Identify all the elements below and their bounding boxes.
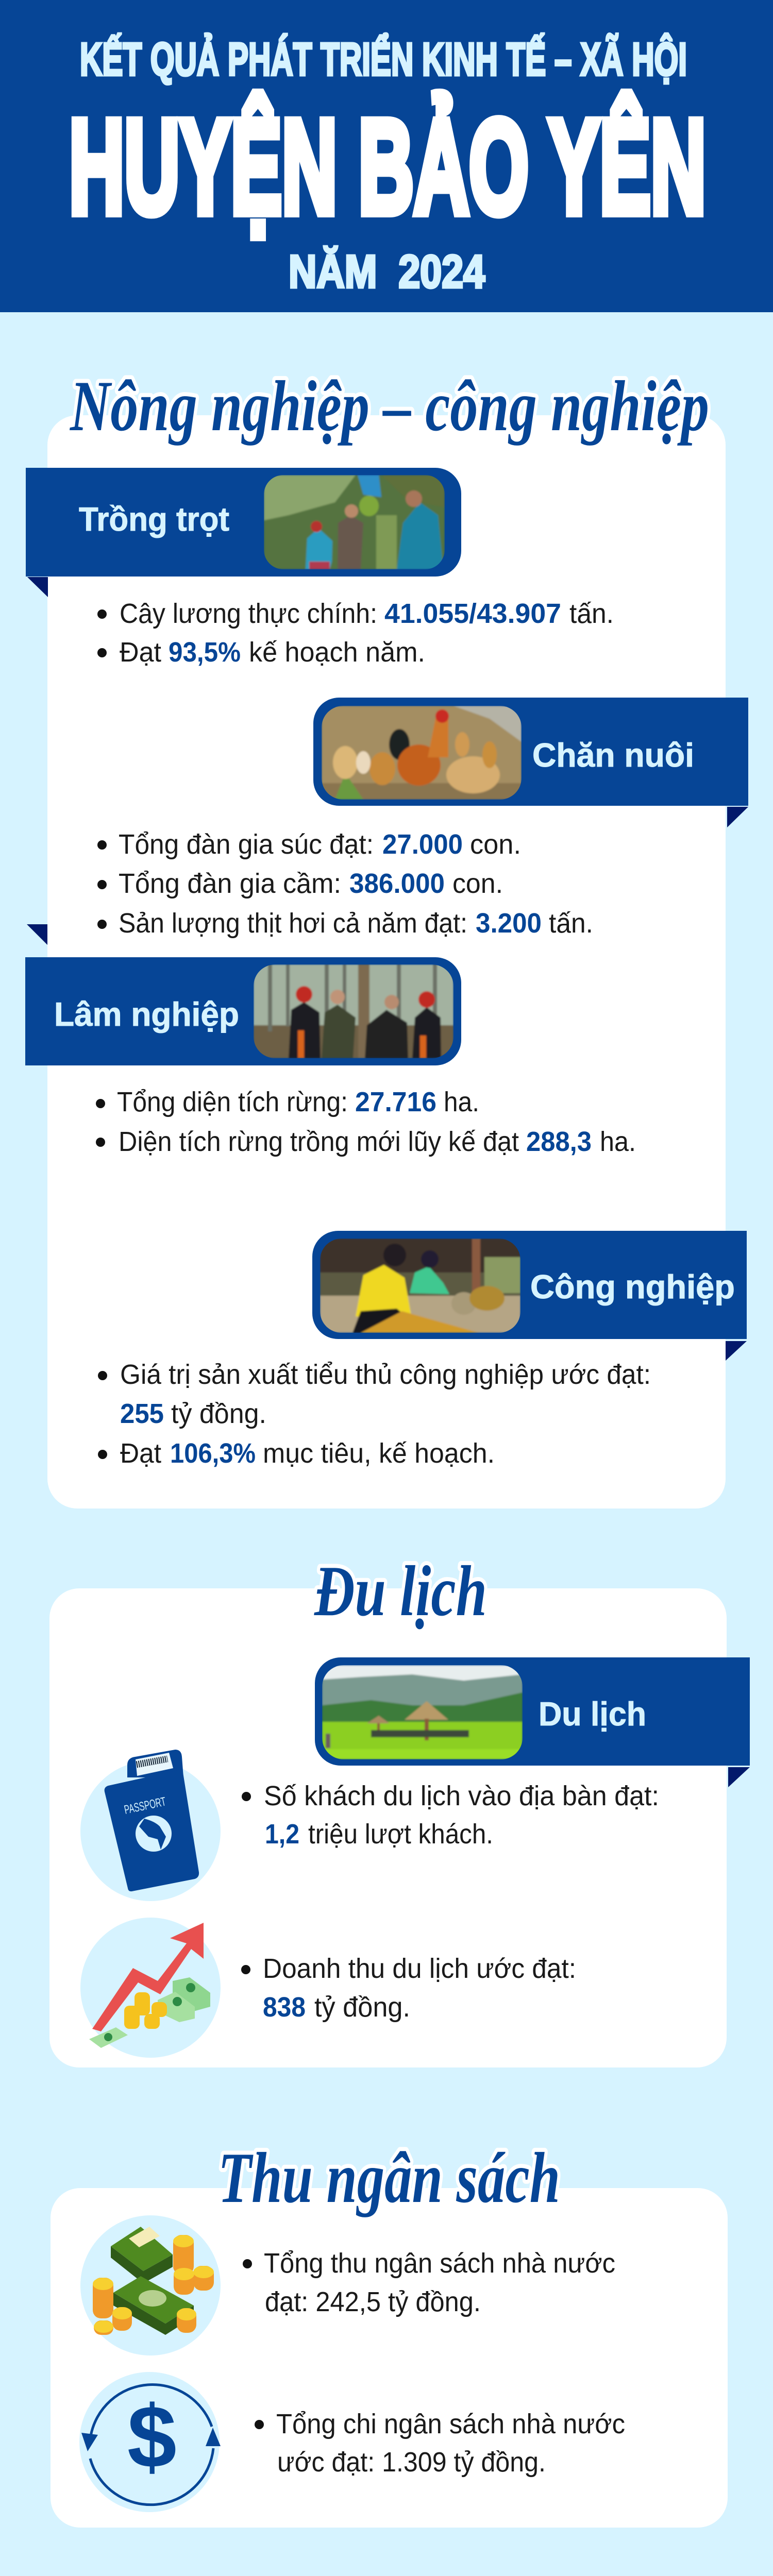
bullet item: Diện tích rừng trồng mới lũy kế đạt bbox=[119, 1126, 519, 1157]
bullet: số khách du lịch: 1,2 bbox=[265, 1819, 299, 1850]
bullet item: 288,3 bbox=[526, 1126, 592, 1157]
bullet: số khách du lịch: triệu lượt khách. bbox=[308, 1819, 493, 1850]
bullet item: tỷ đồng. bbox=[171, 1398, 266, 1429]
bullets: lâm nghiệp bbox=[96, 1087, 636, 1157]
bullet item: ha. bbox=[444, 1087, 479, 1117]
panel: thu ngân sách bbox=[51, 2138, 728, 2528]
ribbon: du lịch bbox=[315, 1657, 750, 1787]
bullet item: Tổng diện tích rừng: bbox=[117, 1087, 348, 1117]
subtitle: năm 2024: NĂM 2024 bbox=[289, 246, 485, 298]
panel background bbox=[51, 2188, 728, 2528]
photo: trồng chuối bbox=[264, 475, 445, 569]
ribbon title: Trồng trọt bbox=[79, 500, 229, 538]
bullet item: 41.055/43.907 bbox=[384, 598, 561, 629]
bullets: trồng trọt bbox=[97, 598, 614, 668]
section heading: Thu ngân sách bbox=[218, 2138, 560, 2218]
icon: chi ngân sách dollar: $ bbox=[127, 2387, 177, 2486]
bullets: công nghiệp bbox=[98, 1359, 651, 1469]
bullet item bbox=[96, 1087, 479, 1117]
bullet item bbox=[97, 829, 521, 860]
panel background bbox=[47, 415, 726, 1509]
bullet item bbox=[98, 1359, 651, 1429]
bullet item bbox=[97, 868, 503, 899]
bullet: tổng chi ngân sách: ước đạt: 1.309 tỷ đồng. bbox=[277, 2447, 546, 2478]
ribbon title: Chăn nuôi bbox=[532, 736, 694, 774]
header banner bbox=[0, 0, 773, 312]
bullet item: 27.000 bbox=[382, 829, 463, 860]
bullet item: Cây lương thực chính: bbox=[120, 598, 377, 629]
bullet item: Đạt bbox=[120, 637, 161, 668]
bullet: tổng thu ngân sách: đạt: 242,5 tỷ đồng. bbox=[265, 2286, 481, 2317]
bullet item: Sản lượng thịt hơi cả năm đạt: bbox=[119, 908, 467, 939]
bullet item: con. bbox=[470, 829, 521, 860]
bullet item bbox=[97, 637, 425, 668]
bullet: tổng chi ngân sách bbox=[255, 2409, 625, 2478]
photo: đàn gà bbox=[322, 706, 522, 800]
bullet: doanh thu du lịch bbox=[241, 1953, 576, 2023]
bullet: doanh thu du lịch: 838 bbox=[263, 1992, 306, 2023]
photo: rừng bbox=[254, 964, 453, 1058]
icon: chi ngân sách dollar bbox=[79, 2372, 221, 2512]
icon: passport: PASSPORT bbox=[123, 1794, 167, 1817]
icon: tiền và xu bbox=[80, 2215, 221, 2355]
panel: nông nghiệp - công nghiệp bbox=[25, 366, 748, 1509]
bullet item: mục tiêu, kế hoạch. bbox=[263, 1438, 495, 1469]
panel background bbox=[49, 1588, 727, 2067]
bullet item: 3.200 bbox=[476, 908, 542, 939]
bullet: số khách du lịch bbox=[242, 1781, 659, 1850]
icon: passport bbox=[80, 1750, 221, 1901]
ribbon title: Công nghiệp bbox=[530, 1268, 735, 1306]
bullet: tổng thu ngân sách: Tổng thu ngân sách nhà nước bbox=[264, 2248, 615, 2279]
section heading: Đu lịch bbox=[313, 1551, 487, 1631]
ribbon: trồng trọt bbox=[26, 468, 461, 597]
ribbon: công nghiệp bbox=[312, 1231, 747, 1361]
ribbon: chăn nuôi bbox=[313, 698, 748, 827]
bullet: tổng chi ngân sách: Tổng chi ngân sách nhà nước bbox=[276, 2409, 625, 2439]
bullet item: Đạt bbox=[120, 1438, 161, 1469]
bullet item: 386.000 bbox=[349, 868, 445, 899]
bullet item: Tổng đàn gia súc đạt: bbox=[119, 829, 374, 860]
bullet item: Tổng đàn gia cầm: bbox=[119, 868, 341, 899]
bullets: chăn nuôi bbox=[97, 829, 593, 939]
bullet item: con. bbox=[452, 868, 503, 899]
bullet item: Giá trị sản xuất tiểu thủ công nghiệp ước đạt: bbox=[120, 1359, 651, 1390]
bullet item: 106,3% bbox=[170, 1438, 256, 1469]
ribbon title: Du lịch bbox=[539, 1695, 646, 1733]
bullet item bbox=[98, 1438, 495, 1469]
bullet item: 93,5% bbox=[169, 637, 241, 668]
bullet: tổng thu ngân sách bbox=[243, 2248, 615, 2317]
bullet item bbox=[97, 598, 614, 629]
ribbon title: Lâm nghiệp bbox=[54, 995, 239, 1033]
bullet item: 255 bbox=[120, 1398, 164, 1429]
panel: du lịch bbox=[49, 1551, 750, 2067]
bullet item: 27.716 bbox=[355, 1087, 436, 1117]
photo: đan lát bbox=[320, 1239, 520, 1333]
bullet: doanh thu du lịch: tỷ đồng. bbox=[314, 1992, 410, 2023]
icon: doanh thu chart arrow bbox=[80, 1918, 221, 2058]
ribbon: lâm nghiệp bbox=[25, 924, 461, 1065]
bullet item: tấn. bbox=[549, 908, 593, 939]
bullet item: kế hoạch năm. bbox=[249, 637, 425, 668]
photo: cánh đồng bbox=[322, 1665, 523, 1759]
bullet item: ha. bbox=[600, 1126, 636, 1157]
bullet: doanh thu du lịch: Doanh thu du lịch ước đạt: bbox=[263, 1953, 576, 1984]
bullet: số khách du lịch: Số khách du lịch vào địa bàn đạt: bbox=[264, 1781, 659, 1811]
bullet item: tấn. bbox=[569, 598, 614, 629]
